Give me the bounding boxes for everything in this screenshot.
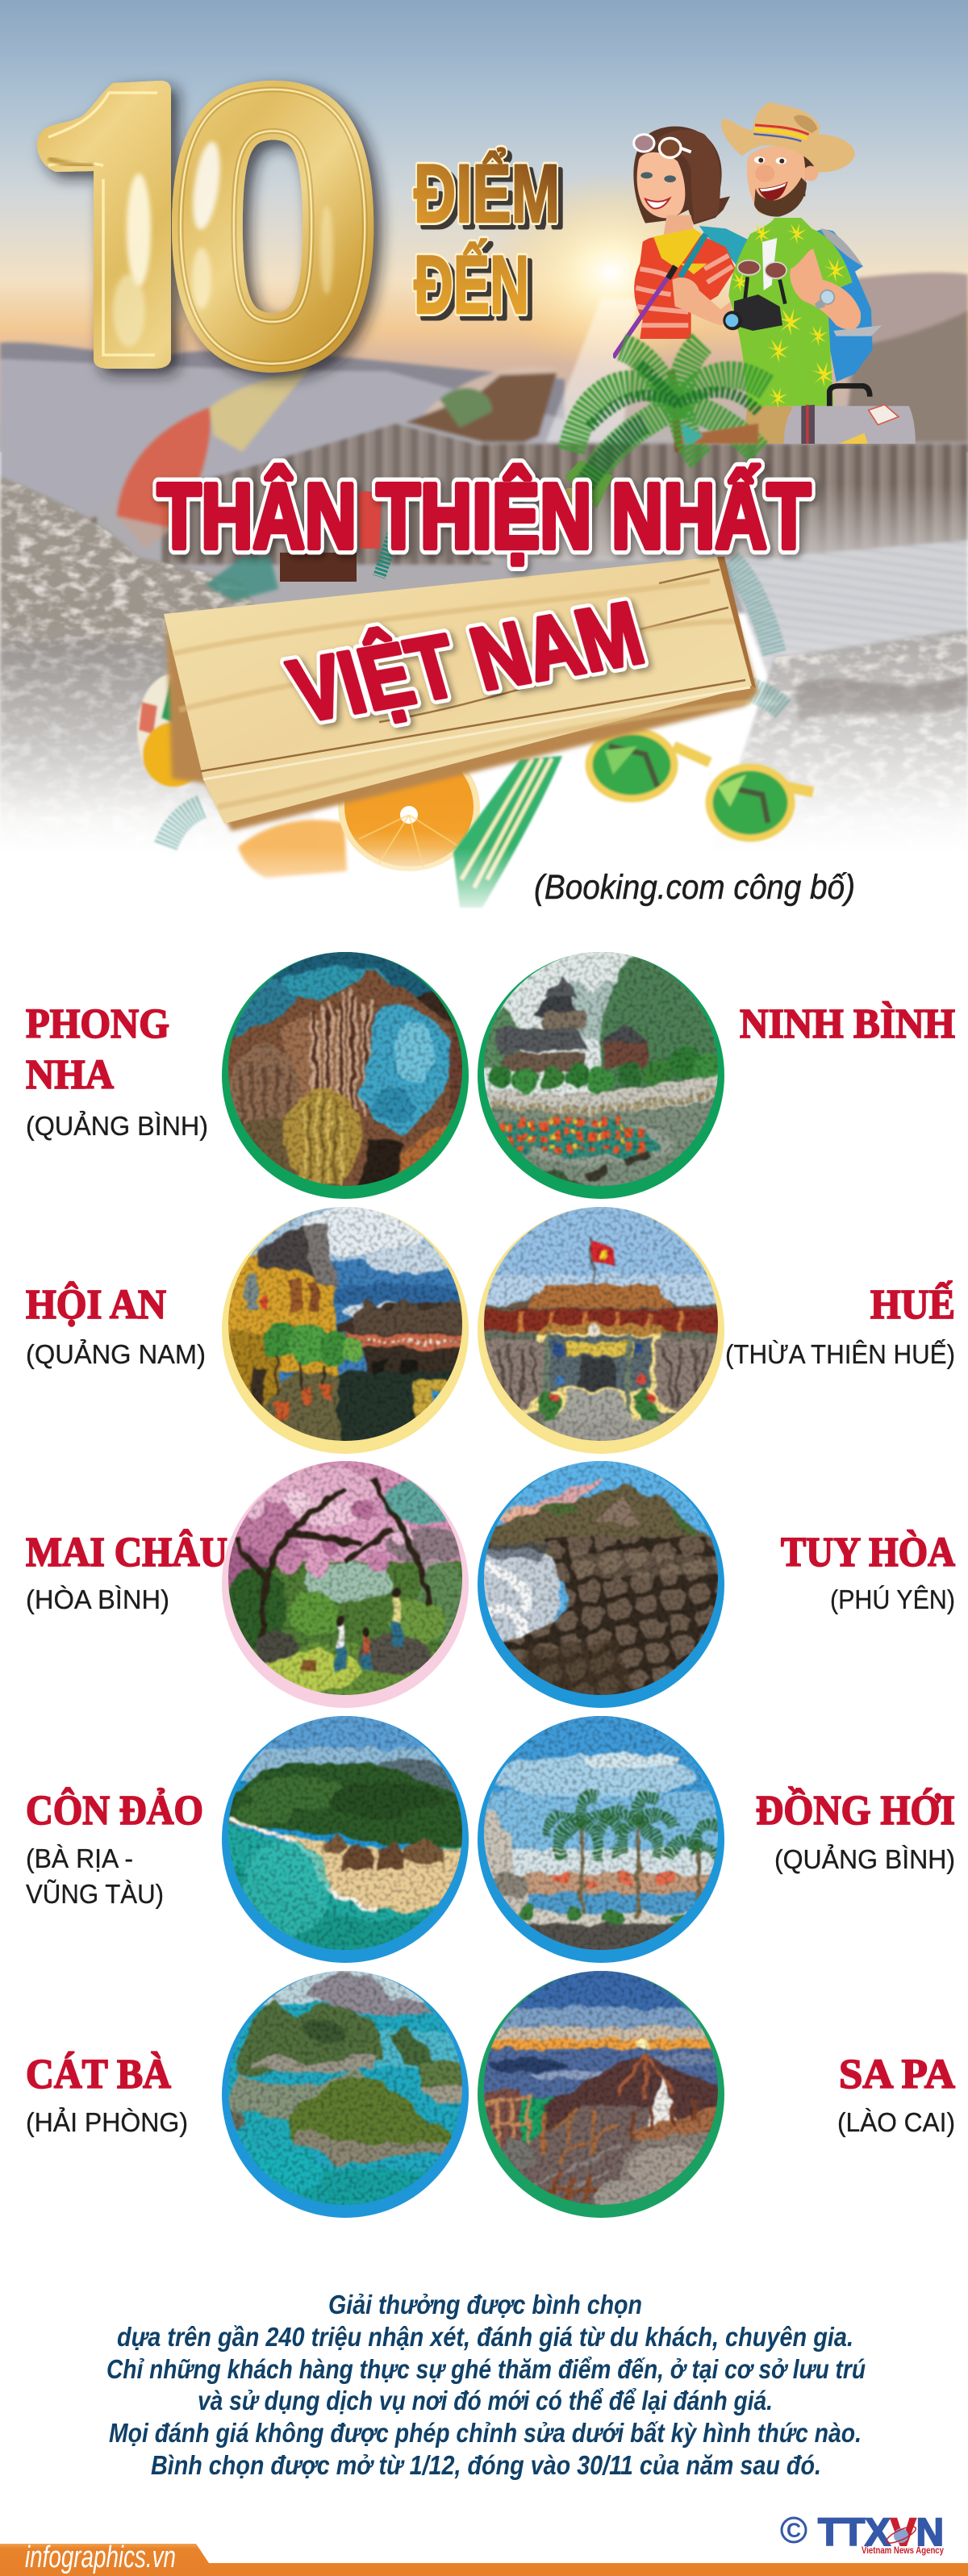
heading: ĐIỂM ĐẾN: ĐIỂM: [414, 148, 560, 240]
label: Cát Bà: (HẢI PHÒNG): [26, 2107, 188, 2137]
explanatory note: dựa trên gần 240 triệu nhận xét, đánh giá từ du khách, chuyên gia.: [117, 2322, 853, 2352]
label: Phong Nha: [26, 1001, 208, 1141]
beach parasol: [117, 367, 311, 549]
footer bar with site name: infographics.vn: [25, 2541, 176, 2574]
label: Côn Đảo: VŨNG TÀU): [26, 1879, 164, 1909]
wooden sign: [164, 557, 758, 831]
big number 10: 0: [165, 9, 381, 442]
explanatory note: và sử dụng dịch vụ nơi đó mới có thể để lại đánh giá.: [198, 2386, 773, 2415]
logo: TTXVN: TTXVN: [818, 2511, 944, 2554]
heading: ĐIỂM ĐẾN: ĐIỂM: [414, 148, 560, 240]
palm tree: [571, 343, 766, 484]
label: Phong Nha: NHA: [26, 1052, 114, 1098]
woman: [613, 127, 748, 357]
explanatory note: Giải thưởng được bình chọn: [328, 2290, 642, 2319]
footer bar with site name: [0, 2541, 968, 2576]
heading: ĐIỂM ĐẾN: ĐẾN: [414, 239, 529, 331]
photo: Ninh Bình: [478, 952, 724, 1199]
label: Đồng Hới: [756, 1785, 955, 1874]
label: Tuy Hòa: [781, 1529, 955, 1614]
header background photo: sunset, fence and rocks: [0, 0, 968, 912]
label: Hội An: [26, 1281, 206, 1369]
label: Phong Nha: (QUẢNG BÌNH): [26, 1111, 208, 1141]
label: Mai Châu: [26, 1529, 227, 1614]
label: Sa Pa: SA PA: [839, 2052, 955, 2098]
label: Phong Nha: PHONG: [26, 1001, 169, 1047]
label: Đồng Hới: ĐỒNG HỚI: [756, 1785, 955, 1834]
logo: TTXVN: C: [786, 2520, 801, 2542]
fade over beach items: [202, 847, 540, 910]
label: Sa Pa: [837, 2052, 955, 2137]
label: Đồng Hới: (QUẢNG BÌNH): [774, 1844, 955, 1874]
photo: Huế: [478, 1207, 724, 1454]
label: Côn Đảo: (BÀ RỊA -: [26, 1843, 133, 1873]
heading on sign: VIỆT NAM: VIỆT NAM: [280, 584, 653, 741]
label: Huế: (THỪA THIÊN HUẾ): [725, 1339, 955, 1369]
orange slices: [238, 742, 480, 878]
label: Ninh Bình: NINH BÌNH: [740, 1000, 955, 1047]
photo: Phong Nha: [222, 952, 469, 1199]
surfboard: [453, 756, 562, 908]
photo: Côn Đảo: [222, 1716, 469, 1963]
source note: (Booking.com công bố): [534, 868, 855, 907]
photo: Tuy Hòa: [478, 1461, 724, 1708]
logo: TTXVN: Vietnam News Agency: [862, 2546, 945, 2556]
label: Cát Bà: [26, 2051, 188, 2137]
photo: Hội An: [222, 1207, 469, 1454]
palm and beach items behind the sign: [165, 460, 784, 847]
beach ball and lemon: [137, 674, 210, 787]
photo: Đồng Hới: [478, 1716, 724, 1963]
explanatory note: Mọi đánh giá không được phép chỉnh sửa dưới bất kỳ hình thức nào.: [109, 2418, 862, 2448]
label: Hội An: HỘI AN: [26, 1281, 166, 1328]
explanatory note: Bình chọn được mở từ 1/12, đóng vào 30/11 của năm sau đó.: [151, 2450, 821, 2480]
photo: Cát Bà: [222, 1971, 469, 2218]
travellers: woman and man: [613, 102, 916, 446]
label: Côn Đảo: [26, 1787, 203, 1909]
photo: Sa Pa: [478, 1971, 724, 2218]
big number 10: 1: [18, 10, 233, 443]
label: Cát Bà: CÁT BÀ: [26, 2051, 171, 2098]
sunglasses: [589, 731, 813, 838]
heading on sign: VIỆT NAM: VIỆT NAM: [280, 584, 653, 741]
heading: ĐIỂM ĐẾN: ĐIỂM: [419, 152, 565, 244]
big number 10: [34, 76, 392, 390]
label: Mai Châu: MAI CHÂU: [26, 1529, 227, 1576]
label: Tuy Hòa: (PHÚ YÊN): [830, 1584, 955, 1614]
label: Côn Đảo: CÔN ĐẢO: [26, 1787, 203, 1834]
heading: ĐIỂM ĐẾN: ĐẾN: [419, 244, 534, 336]
heading: ĐIỂM ĐẾN: [414, 148, 565, 336]
label: Huế: [725, 1280, 955, 1369]
heading: ĐIỂM ĐẾN: ĐẾN: [414, 239, 529, 331]
big number 10: 0: [165, 9, 381, 442]
label: Sa Pa: (LÀO CAI): [837, 2107, 955, 2137]
label: Hội An: (QUẢNG NAM): [26, 1339, 206, 1369]
man: [721, 102, 916, 446]
explanatory note: [106, 2290, 866, 2480]
photo: Mai Châu: [222, 1461, 469, 1708]
big number 10: 0: [165, 9, 381, 442]
label: Mai Châu: (HÒA BÌNH): [26, 1584, 169, 1614]
label: Huế: HUẾ: [870, 1280, 955, 1328]
